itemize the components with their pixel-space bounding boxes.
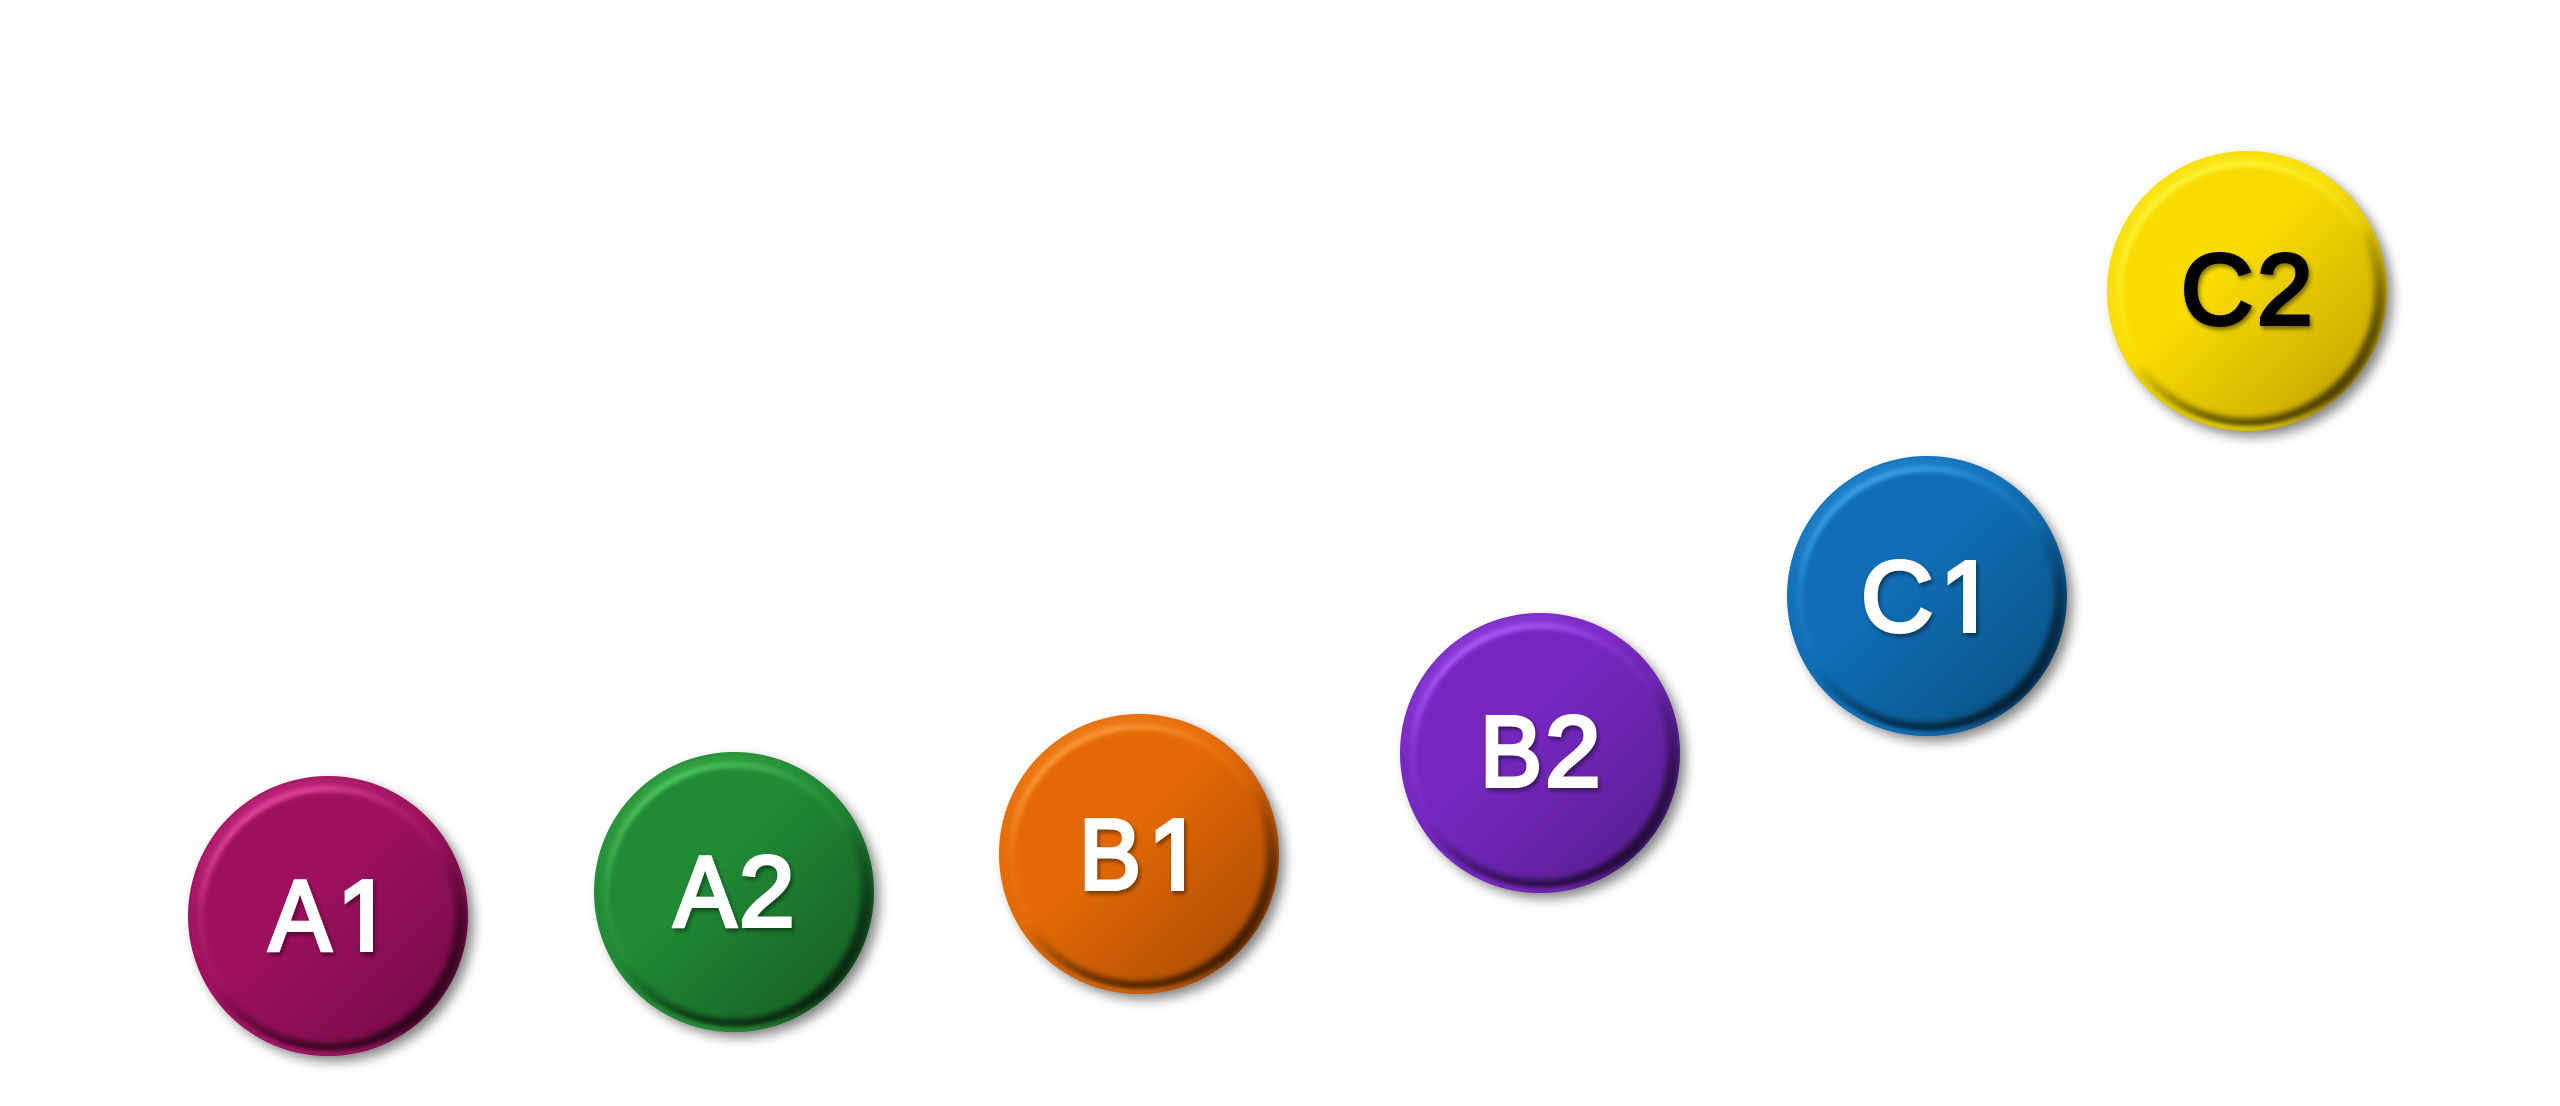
label: C1: C <box>1861 541 1933 653</box>
label: C1: 1 <box>1940 541 1996 653</box>
badge: B1 <box>999 714 1284 999</box>
label: B2: B <box>1480 696 1542 808</box>
label: A1: A <box>269 860 331 972</box>
label: B1: B <box>1079 799 1141 911</box>
badge: A2 <box>594 752 879 1037</box>
label: C2 <box>2181 234 2313 346</box>
badge: C2 <box>2107 151 2392 436</box>
badge: B2 <box>1400 613 1685 898</box>
badge: A1 <box>188 776 473 1061</box>
label: A1 <box>266 879 378 958</box>
label: A2 <box>674 836 795 948</box>
label: B2: 2 <box>1545 696 1601 808</box>
label: C2: C <box>2181 234 2253 346</box>
label: A1: 1 <box>337 860 393 972</box>
label: B2 <box>1480 696 1601 808</box>
label: B1 <box>1084 818 1189 897</box>
label: B1: 1 <box>1148 799 1204 911</box>
badge: C1 <box>1787 456 2072 741</box>
label: C1 <box>1864 559 1980 640</box>
label: A2: A <box>674 836 736 948</box>
label: C2: 2 <box>2257 234 2313 346</box>
label: A2: 2 <box>739 836 795 948</box>
